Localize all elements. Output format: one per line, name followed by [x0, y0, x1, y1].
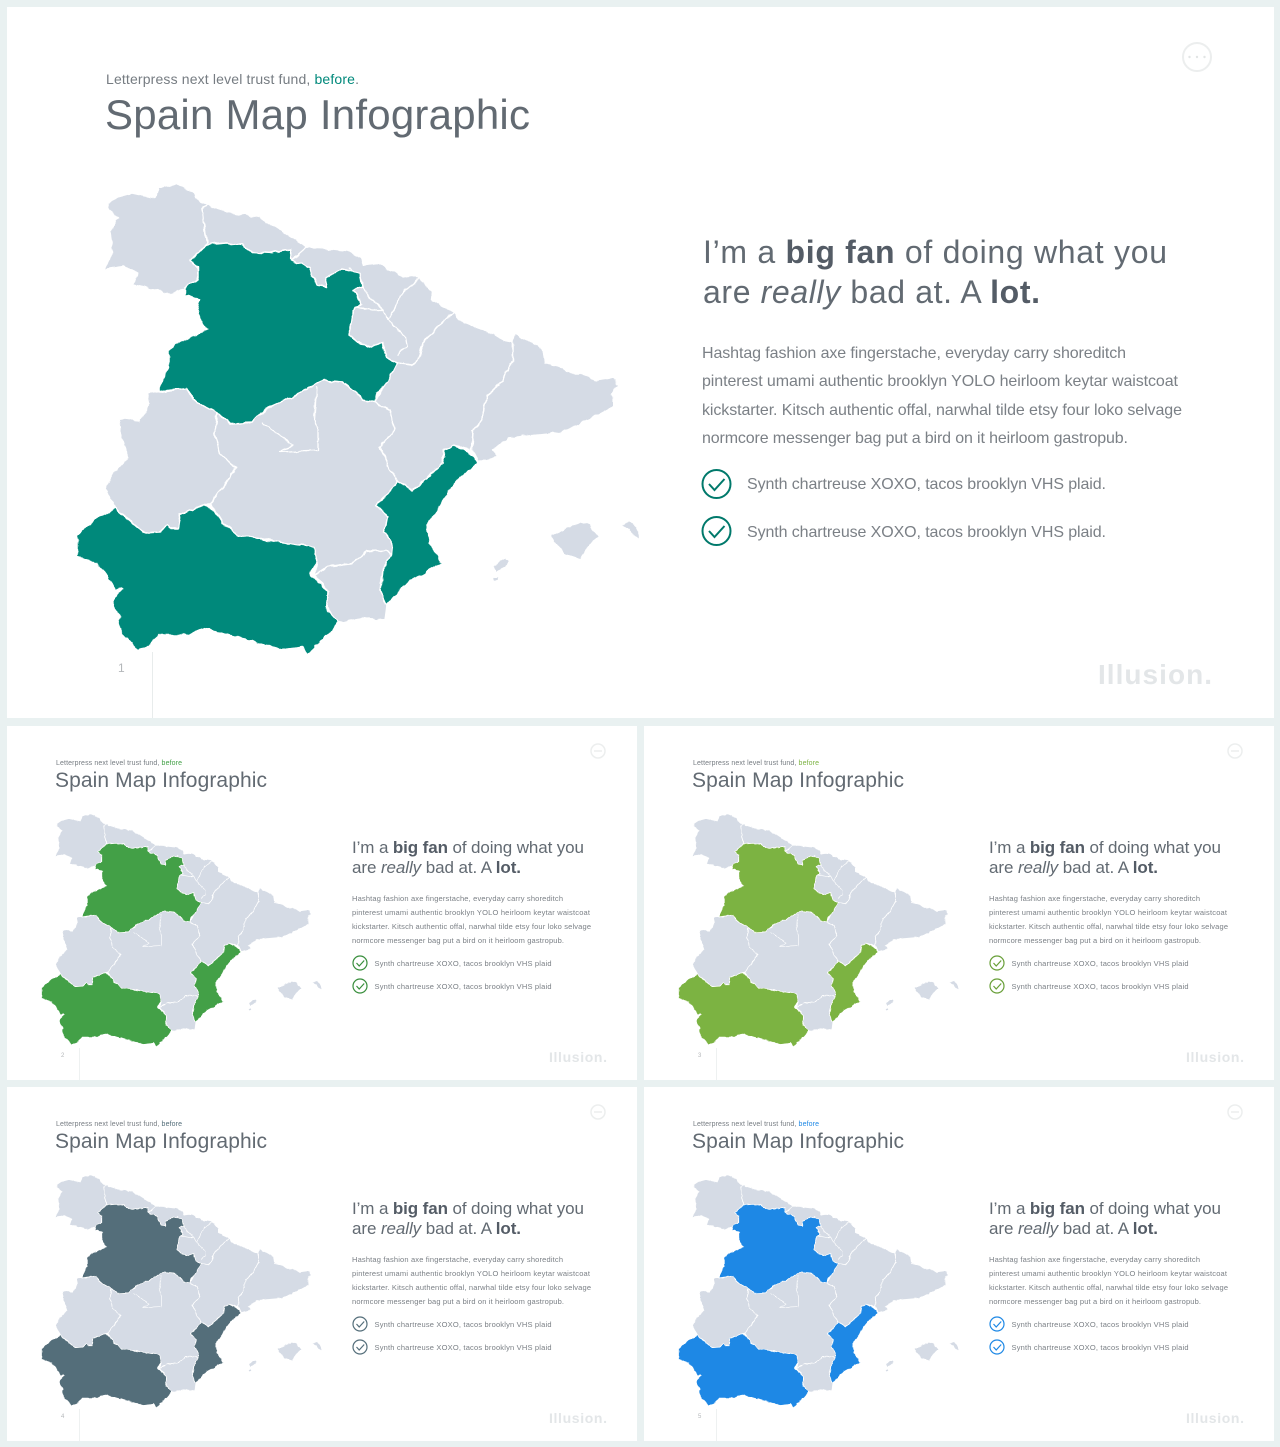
page number — [61, 1409, 80, 1441]
checklist item 1: Synth chartreuse XOXO, tacos brooklyn VHS plaid — [374, 1320, 552, 1329]
panel: slide 3, light green — [644, 726, 1274, 1080]
heading: are really bad at. A lot. — [352, 1219, 521, 1238]
body text: normcore messenger bag put a bird on it heirloom gastropub. — [352, 936, 564, 945]
body text: kickstarter. Kitsch authentic offal, narwhal tilde etsy four loko selvage — [702, 402, 1182, 419]
title: Spain Map Infographic — [105, 91, 530, 138]
kicker: Letterpress next level trust fund, before — [56, 1121, 182, 1128]
page number — [698, 1048, 717, 1080]
body text: kickstarter. Kitsch authentic offal, narwhal tilde etsy four loko selvage — [352, 1283, 591, 1292]
kicker: Letterpress next level trust fund, before — [693, 760, 819, 767]
logo: Illusion. — [549, 1049, 607, 1065]
heading: I’m a big fan of doing what you — [352, 838, 584, 857]
checklist item 2: Synth chartreuse XOXO, tacos brooklyn VHS plaid — [374, 982, 552, 991]
page number: 3 — [698, 1053, 702, 1059]
body text: pinterest umami authentic brooklyn YOLO heirloom keytar waistcoat — [989, 1269, 1228, 1278]
page number: 5 — [698, 1414, 702, 1420]
checklist item 1: Synth chartreuse XOXO, tacos brooklyn VHS plaid — [1012, 959, 1188, 968]
heading: I’m a big fan of doing what you — [703, 234, 1167, 270]
body text: kickstarter. Kitsch authentic offal, narwhal tilde etsy four loko selvage — [352, 922, 591, 931]
body text: Hashtag fashion axe fingerstache, everyday carry shoreditch — [989, 894, 1200, 903]
checklist item 2 — [990, 1340, 1188, 1354]
body text: normcore messenger bag put a bird on it heirloom gastropub. — [352, 1297, 564, 1306]
map — [678, 1175, 959, 1408]
body text: Hashtag fashion axe fingerstache, everyday carry shoreditch — [352, 1255, 563, 1264]
menu icon — [1228, 1105, 1242, 1119]
heading — [352, 838, 584, 877]
menu icon — [1183, 43, 1211, 71]
heading: I’m a big fan of doing what you — [989, 1199, 1221, 1218]
title: Spain Map Infographic — [55, 769, 267, 792]
checklist item 2 — [353, 1340, 552, 1354]
panel: main slide, teal — [7, 7, 1274, 718]
menu icon — [1228, 744, 1242, 758]
logo: Illusion. — [1098, 659, 1212, 690]
body text: pinterest umami authentic brooklyn YOLO heirloom keytar waistcoat — [702, 373, 1179, 390]
heading: I’m a big fan of doing what you — [352, 1199, 584, 1218]
checklist item 1 — [353, 956, 552, 970]
map — [41, 814, 322, 1047]
checklist item 1 — [702, 470, 1106, 498]
checklist item 1: Synth chartreuse XOXO, tacos brooklyn VHS plaid — [1012, 1320, 1188, 1329]
checklist item 1 — [990, 956, 1188, 970]
body text: kickstarter. Kitsch authentic offal, narwhal tilde etsy four loko selvage — [989, 1283, 1228, 1292]
body text — [989, 894, 1228, 945]
map: Spain regions highlighted teal — [77, 183, 640, 655]
heading: are really bad at. A lot. — [989, 858, 1158, 877]
kicker: Letterpress next level trust fund, before — [693, 1121, 819, 1128]
heading: are really bad at. A lot. — [352, 858, 521, 877]
body text — [702, 345, 1182, 447]
body text — [989, 1255, 1228, 1306]
map — [41, 1175, 322, 1408]
body text: pinterest umami authentic brooklyn YOLO heirloom keytar waistcoat — [989, 908, 1228, 917]
logo: Illusion. — [1186, 1049, 1244, 1065]
page number — [118, 652, 153, 718]
page number: 4 — [61, 1414, 65, 1420]
heading — [989, 838, 1221, 877]
page number: 1 — [118, 661, 125, 675]
page number — [61, 1048, 80, 1080]
page number — [698, 1409, 717, 1441]
menu icon — [591, 744, 605, 758]
kicker: Letterpress next level trust fund, before — [56, 760, 182, 767]
heading second line: are really bad at. A lot. — [703, 274, 1040, 310]
heading: are really bad at. A lot. — [989, 1219, 1158, 1238]
logo: Illusion. — [549, 1410, 607, 1426]
title: Spain Map Infographic — [55, 1130, 267, 1153]
title: Spain Map Infographic — [692, 769, 904, 792]
checklist item 2: Synth chartreuse XOXO, tacos brooklyn VHS plaid. — [747, 524, 1106, 541]
map — [678, 814, 959, 1047]
logo: Illusion. — [1186, 1410, 1244, 1426]
checklist item 2: Synth chartreuse XOXO, tacos brooklyn VHS plaid — [1012, 1343, 1188, 1352]
body text: normcore messenger bag put a bird on it heirloom gastropub. — [989, 936, 1201, 945]
panel: slide 4, slate — [7, 1087, 637, 1441]
heading — [989, 1199, 1221, 1238]
checklist item 1: Synth chartreuse XOXO, tacos brooklyn VHS plaid — [374, 959, 552, 968]
body text: normcore messenger bag put a bird on it heirloom gastropub. — [989, 1297, 1201, 1306]
page number: 2 — [61, 1053, 65, 1059]
checklist item 2 — [353, 979, 552, 993]
body text: kickstarter. Kitsch authentic offal, narwhal tilde etsy four loko selvage — [989, 922, 1228, 931]
checklist item 2 — [702, 517, 1106, 545]
kicker: Letterpress next level trust fund, before. — [106, 71, 359, 87]
body text — [352, 1255, 591, 1306]
body text: pinterest umami authentic brooklyn YOLO heirloom keytar waistcoat — [352, 1269, 591, 1278]
body text: Hashtag fashion axe fingerstache, everyday carry shoreditch — [352, 894, 563, 903]
checklist item 1 — [990, 1317, 1188, 1331]
body text: normcore messenger bag put a bird on it heirloom gastropub. — [702, 430, 1128, 447]
menu icon — [591, 1105, 605, 1119]
checklist item 2: Synth chartreuse XOXO, tacos brooklyn VHS plaid — [1012, 982, 1188, 991]
body text: Hashtag fashion axe fingerstache, everyday carry shoreditch — [989, 1255, 1200, 1264]
checklist item 2 — [990, 979, 1188, 993]
body text: Hashtag fashion axe fingerstache, everyday carry shoreditch — [702, 345, 1126, 362]
panel: slide 5, blue — [644, 1087, 1274, 1441]
checklist item 2: Synth chartreuse XOXO, tacos brooklyn VHS plaid — [374, 1343, 552, 1352]
body text — [352, 894, 591, 945]
heading: I’m a big fan of doing what you — [989, 838, 1221, 857]
checklist item 1 — [353, 1317, 552, 1331]
title: Spain Map Infographic — [692, 1130, 904, 1153]
panel: slide 2, green — [7, 726, 637, 1080]
body text: pinterest umami authentic brooklyn YOLO heirloom keytar waistcoat — [352, 908, 591, 917]
heading — [352, 1199, 584, 1238]
checklist item 1: Synth chartreuse XOXO, tacos brooklyn VHS plaid. — [747, 476, 1106, 493]
